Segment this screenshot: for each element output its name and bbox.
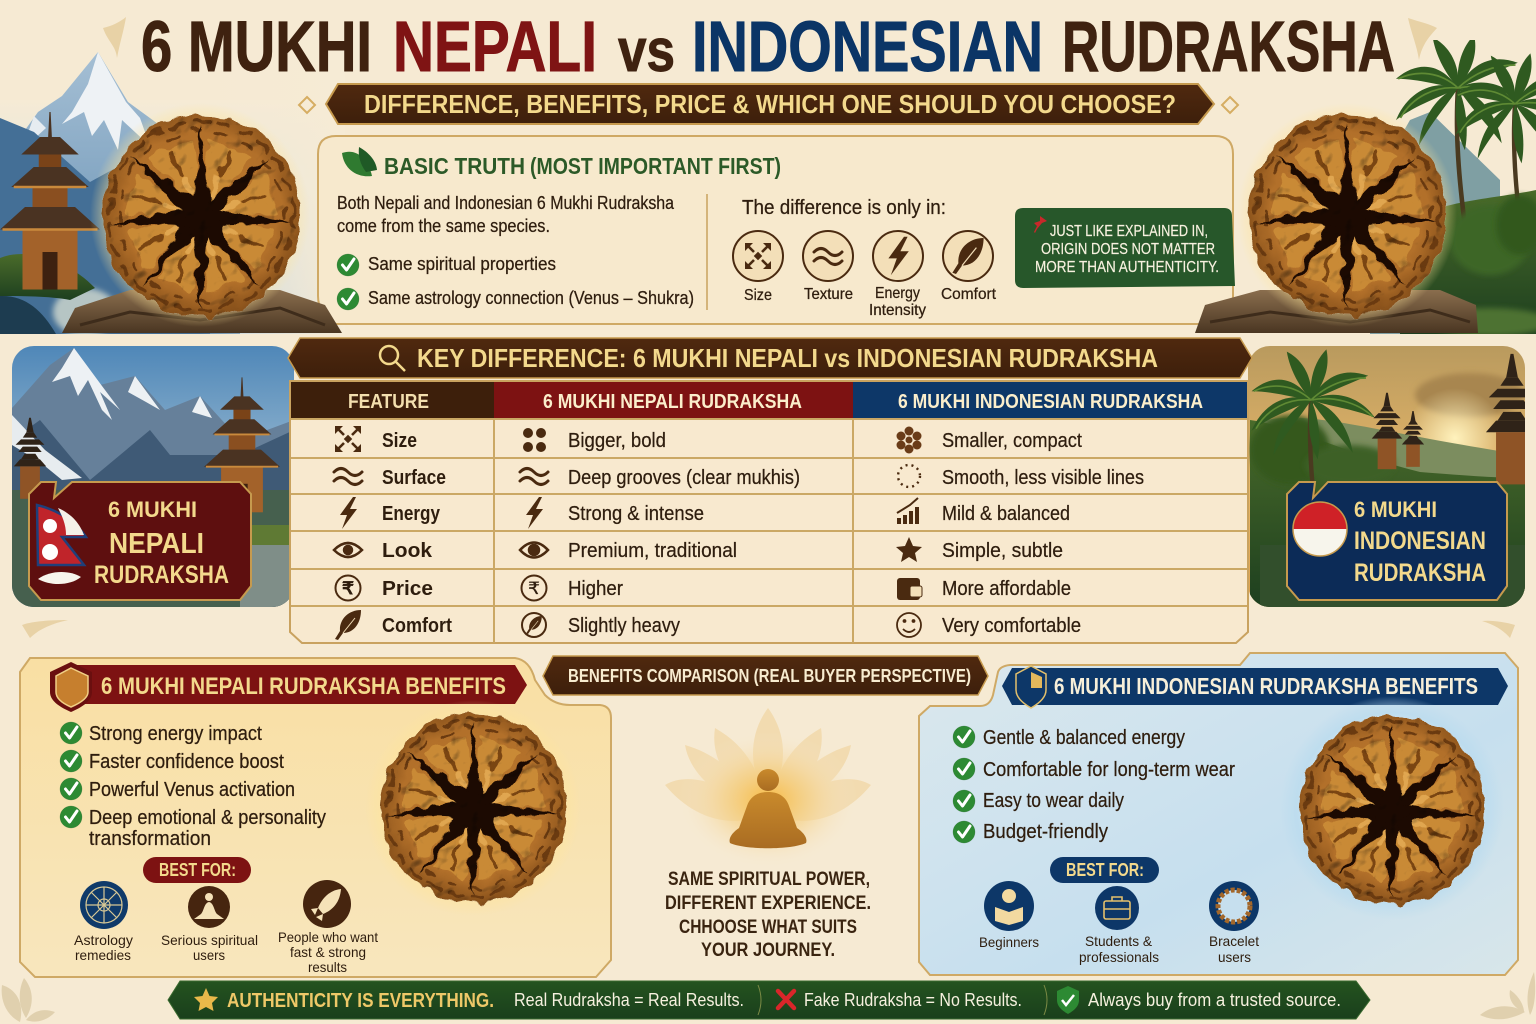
pill: best for Nepali	[143, 857, 251, 883]
text: same spiritual power: DIFFERENT EXPERIENCE.	[665, 893, 871, 914]
icon: serious spiritual users	[161, 886, 258, 963]
text: authenticity: AUTHENTICITY IS EVERYTHING.	[227, 990, 494, 1012]
icon: shield check	[1057, 986, 1079, 1014]
text block: same species: come from the same species.	[337, 216, 550, 236]
icon: energy intensity	[869, 231, 926, 319]
list: same properties: Same astrology connection (Venus – Shukra)	[368, 288, 694, 308]
icon: serious spiritual users: Serious spiritual	[161, 932, 258, 948]
icon: texture: Texture	[804, 286, 853, 303]
icon: astrology remedies: remedies	[75, 947, 131, 963]
text: label Nepal: 6 MUKHI	[108, 497, 197, 522]
icon: star	[194, 988, 218, 1011]
row: surface: Deep grooves (clear mukhis)	[568, 467, 800, 489]
label: 6 mukhi nepali	[29, 482, 251, 600]
benefits comparison banner: BENEFITS COMPARISON (REAL BUYER PERSPECTIVE)	[568, 666, 971, 686]
icon: fast results rocket: results	[308, 959, 347, 975]
row: price: ₹	[528, 579, 540, 598]
icon: astrology remedies	[74, 881, 133, 963]
list: Indonesian benefits: Gentle & balanced energy	[983, 727, 1185, 749]
table header	[291, 382, 1247, 419]
row: comfort: Very comfortable	[942, 615, 1081, 637]
icon: leaf	[342, 147, 377, 176]
title: RUDRAKSHA	[1062, 8, 1395, 87]
meditation figure and lotus	[665, 708, 871, 868]
scene: Nepal (middle left)	[12, 346, 294, 607]
row: price: Price	[382, 578, 433, 600]
row: comfort: Slightly heavy	[568, 615, 680, 637]
list: Indonesian benefits: Comfortable for long-term wear	[983, 759, 1235, 781]
scene: Indonesia (middle right)	[1248, 346, 1536, 607]
row: look: Look	[382, 540, 433, 562]
icon: students and professionals	[1079, 886, 1159, 965]
title: NEPALI	[393, 8, 597, 87]
heading ribbon: Nepali benefits: 6 MUKHI NEPALI RUDRAKSHA BENEFITS	[101, 673, 506, 700]
icon: serious spiritual users: users	[193, 947, 225, 963]
text: same spiritual power	[665, 869, 871, 961]
icon: fast results rocket: fast & strong	[290, 944, 366, 960]
icon: students and professionals: professionals	[1079, 949, 1159, 965]
text block: same species: Both Nepali and Indonesian 6 Mukhi Rudraksha	[337, 193, 675, 213]
list: Nepali benefits: Powerful Venus activation	[89, 779, 295, 801]
panel: basic truth	[318, 136, 1235, 324]
list: Indonesian benefits	[953, 726, 1235, 843]
title: 6 MUKHI	[141, 8, 372, 87]
icon: fast results rocket: People who want	[278, 929, 378, 945]
flourish: middle left	[22, 620, 68, 638]
icon: size: Size	[744, 287, 772, 304]
text: the difference: The difference is only in:	[742, 197, 946, 219]
row: energy: Strong & intense	[568, 503, 704, 525]
icon: size	[733, 231, 783, 304]
pill: best for Nepali: BEST FOR:	[159, 860, 236, 880]
row: size	[335, 426, 1082, 454]
icon: red cross	[778, 991, 794, 1008]
comparison table	[290, 381, 1248, 643]
text: same spiritual power: SAME SPIRITUAL POWER,	[668, 869, 870, 890]
row: energy: Mild & balanced	[942, 503, 1070, 525]
heading: basic truth: (MOST IMPORTANT FIRST)	[530, 153, 781, 179]
table header: 6 MUKHI INDONESIAN RUDRAKSHA	[898, 391, 1203, 413]
subtitle banner: DIFFERENCE, BENEFITS, PRICE & WHICH ONE SHOULD YOU CHOOSE?	[364, 89, 1176, 119]
bead: top left	[90, 103, 310, 327]
row: energy	[340, 497, 1070, 529]
heading: basic truth	[384, 153, 781, 179]
icon: bracelet users: users	[1218, 949, 1251, 965]
title: vs	[618, 17, 675, 84]
row: comfort	[335, 610, 1081, 640]
list: Nepali benefits: transformation	[89, 828, 211, 850]
pill: best for Indonesian: BEST FOR:	[1066, 860, 1144, 880]
row: energy: Energy	[382, 503, 441, 525]
scene: Nepal mountain and pagoda (top left)	[0, 52, 322, 334]
floral: bottom left	[2, 978, 55, 1022]
list: same properties	[337, 254, 694, 310]
floral: bottom right	[1480, 972, 1535, 1019]
row: look	[334, 537, 1063, 562]
icon: students and professionals: Students &	[1085, 933, 1153, 949]
panel: Nepali benefits	[20, 658, 611, 977]
text: label Indonesia	[1354, 497, 1486, 587]
flourish: middle right	[1482, 621, 1515, 638]
row: surface	[334, 465, 1144, 489]
bead: Indonesian benefits	[1280, 696, 1504, 920]
scene: tropical palms (top right)	[1370, 35, 1536, 336]
callout: authenticity	[1015, 208, 1235, 288]
callout: authenticity: JUST LIKE EXPLAINED IN,	[1050, 223, 1208, 240]
table header: 6 MUKHI NEPALI RUDRAKSHA	[543, 391, 802, 413]
text: label Indonesia: 6 MUKHI	[1354, 497, 1437, 522]
row: size: Bigger, bold	[568, 430, 666, 452]
list: Nepali benefits: Strong energy impact	[89, 723, 262, 745]
row: surface: Surface	[382, 467, 446, 489]
list: same properties: Same spiritual properties	[368, 254, 556, 274]
benefits comparison banner	[543, 656, 988, 695]
panel: Indonesian benefits	[919, 653, 1518, 975]
flourish: title left	[103, 17, 126, 58]
flourish: title right	[1408, 18, 1437, 60]
list: Nepali benefits	[60, 722, 326, 850]
row: look: Simple, subtle	[942, 540, 1063, 562]
icon: energy intensity: Energy	[875, 285, 920, 302]
text: label Nepal	[94, 497, 229, 589]
row: price: ₹	[342, 579, 354, 598]
icon: comfort	[941, 231, 997, 303]
callout: authenticity: MORE THAN AUTHENTICITY.	[1035, 259, 1219, 276]
icon: beginners: Beginners	[979, 934, 1039, 950]
icon: comfort: Comfort	[941, 286, 997, 303]
text: same spiritual power: CHHOOSE WHAT SUITS	[679, 917, 857, 938]
list: Nepali benefits: Faster confidence boost	[89, 751, 284, 773]
text: real results: Real Rudraksha = Real Results.	[514, 990, 744, 1010]
list: Indonesian benefits: Budget-friendly	[983, 821, 1108, 843]
rock: left	[62, 290, 342, 333]
title: INDONESIAN	[692, 8, 1043, 87]
heading ribbon: Nepali benefits	[50, 662, 527, 712]
row: price	[336, 576, 1071, 600]
subtitle banner	[299, 84, 1238, 124]
row: price: More affordable	[942, 578, 1071, 600]
icon: beginners	[979, 881, 1039, 950]
row: price: Higher	[568, 578, 623, 600]
text: same spiritual power: YOUR JOURNEY.	[701, 940, 835, 961]
text: label Nepal: RUDRAKSHA	[94, 561, 229, 589]
heading: basic truth: BASIC TRUTH	[384, 153, 525, 179]
icon: bracelet users	[1209, 881, 1259, 965]
text: trusted source: Always buy from a trusted source.	[1088, 990, 1341, 1010]
heading ribbon: Indonesian benefits	[1002, 666, 1508, 708]
icon: energy intensity: Intensity	[869, 302, 926, 319]
text: label Indonesia: INDONESIAN	[1354, 527, 1486, 555]
list: Indonesian benefits: Easy to wear daily	[983, 790, 1124, 812]
rock: right	[1195, 290, 1478, 333]
bead: Nepali benefits	[365, 700, 581, 916]
text: fake results: Fake Rudraksha = No Results.	[804, 990, 1022, 1010]
icon: fast results rocket	[278, 880, 378, 975]
icon: bracelet users: Bracelet	[1209, 933, 1259, 949]
list: Nepali benefits: Deep emotional & personality	[89, 807, 326, 829]
icon: texture	[803, 231, 853, 303]
authenticity footer bar	[168, 981, 1370, 1019]
row: comfort: Comfort	[382, 615, 452, 637]
text: label Nepal: NEPALI	[109, 528, 204, 560]
icon: Nepal flag	[37, 505, 86, 584]
row: size: Smaller, compact	[942, 430, 1082, 452]
icon: Indonesia flag	[1293, 502, 1347, 556]
icon: magnifier	[380, 346, 405, 371]
pill: best for Indonesian	[1050, 857, 1159, 883]
table title banner: KEY DIFFERENCE: 6 MUKHI NEPALI vs INDONESIAN RUDRAKSHA	[417, 343, 1158, 373]
row: look: Premium, traditional	[568, 540, 737, 562]
callout: authenticity: ORIGIN DOES NOT MATTER	[1041, 241, 1215, 258]
table header: FEATURE	[348, 391, 429, 413]
table title banner	[288, 338, 1252, 378]
icon: astrology remedies: Astrology	[74, 932, 133, 948]
title	[141, 8, 1395, 87]
bead: top right	[1237, 103, 1457, 327]
row: size: Size	[382, 430, 417, 452]
row: surface: Smooth, less visible lines	[942, 467, 1144, 489]
text block: same species	[337, 193, 675, 236]
label: 6 mukhi indonesian	[1287, 482, 1507, 600]
text: label Indonesia: RUDRAKSHA	[1354, 559, 1486, 587]
